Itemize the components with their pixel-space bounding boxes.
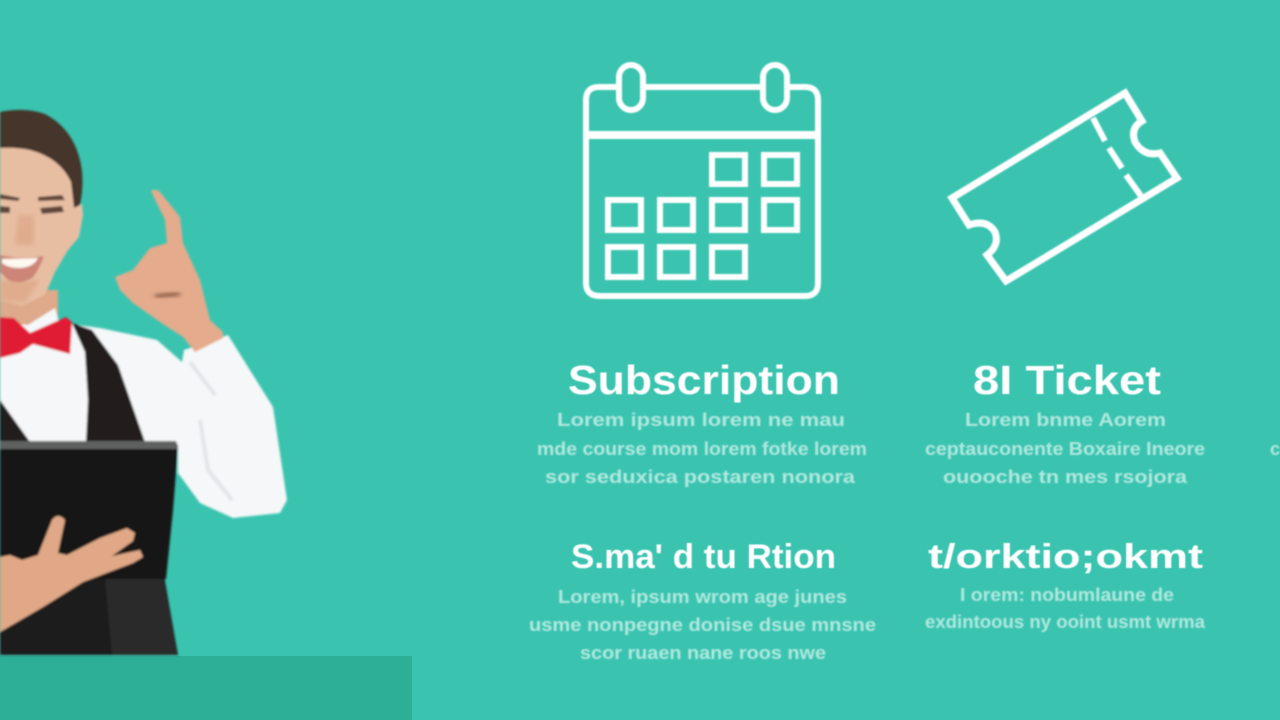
face: [0, 145, 83, 306]
tablet top edge: [0, 441, 178, 449]
text: third block: [529, 538, 876, 663]
neck: [0, 290, 58, 332]
hair: [0, 110, 82, 208]
body: ticket: [925, 410, 1205, 487]
presenter shirt and sleeve: [0, 322, 287, 518]
raised hand: [115, 190, 223, 352]
lower hand: [0, 516, 143, 632]
body: ticket: Lorem bnme Aorem: [965, 410, 1166, 430]
body: subscription: mde course mom lorem fotke lorem: [537, 439, 867, 459]
body: fourth block: exdintoous ny ooint usmt wrma: [925, 612, 1206, 632]
heading: ticket: 8I Ticket: [973, 357, 1161, 403]
icon: calendar: [586, 65, 818, 296]
sleeve shading: [190, 362, 232, 500]
body: ticket: ceptauconente Boxaire Ineore: [925, 439, 1205, 459]
presenter lower vest: [0, 570, 178, 655]
footer band: [0, 656, 412, 720]
ticket perforation: [1093, 118, 1141, 196]
clipped text fragment at right edge: c: [1270, 439, 1280, 459]
text: ticket block: [925, 357, 1205, 487]
heading: fourth block: t/orktio;okmt: [928, 538, 1203, 576]
body: third block: scor ruaen nane roos nwe: [580, 643, 826, 663]
heading: subscription: Subscription: [568, 357, 840, 403]
body: third block: Lorem, ipsum wrom age junes: [558, 587, 847, 607]
calendar rings: [619, 65, 787, 110]
calendar day squares: [608, 155, 797, 277]
text: fourth block: [925, 538, 1206, 632]
eyebrows and eyes: [0, 194, 65, 214]
trouser shading: [105, 578, 178, 655]
collar: [0, 308, 59, 336]
face shading: [0, 215, 40, 303]
body: third block: [529, 587, 876, 663]
calendar header divider: [587, 131, 818, 139]
icon: ticket: [952, 93, 1177, 281]
presenter vest: [0, 323, 145, 442]
body: subscription: [537, 410, 867, 487]
hand crease: [155, 293, 180, 297]
calendar body: [586, 87, 818, 296]
body: subscription: Lorem ipsum lorem ne mau: [557, 410, 845, 430]
tablet: [0, 442, 178, 579]
teeth: [2, 258, 38, 268]
body: fourth block: [925, 585, 1206, 632]
body: subscription: sor seduxica postaren nonora: [545, 467, 856, 487]
text: subscription block: [537, 357, 867, 487]
bow tie: [0, 317, 72, 358]
photo: presenter with tablet: [0, 110, 287, 655]
mouth: [0, 255, 44, 282]
heading: third block: S.ma' d tu Rtion: [571, 538, 836, 576]
body: third block: usme nonpegne donise dsue mnsne: [529, 615, 876, 635]
body: fourth block: I orem: nobumlaune de: [960, 585, 1174, 605]
ticket outline: [952, 93, 1177, 281]
body: ticket: ouooche tn mes rsojora: [943, 467, 1188, 487]
